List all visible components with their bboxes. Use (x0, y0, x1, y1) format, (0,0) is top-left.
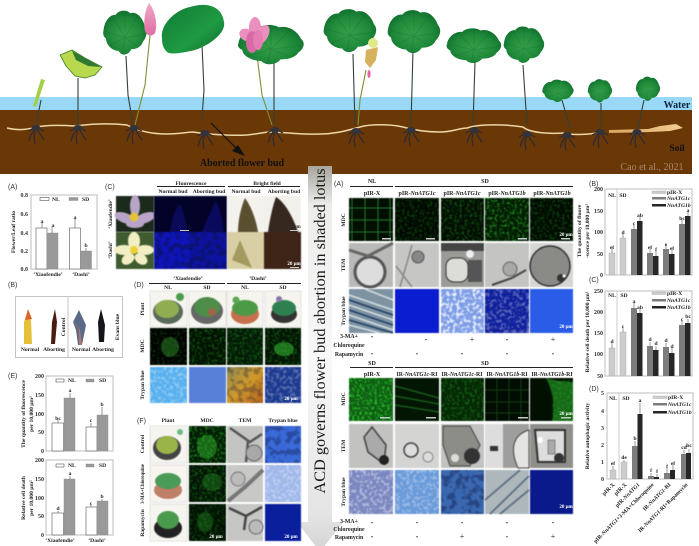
treatment table: Chloroquine (333, 343, 365, 349)
panel B right: quantity of fluorescence chart (577, 181, 692, 279)
panel C: fluorescence and bright field of buds: Bright field (253, 181, 282, 187)
yellow young leaf (60, 50, 102, 78)
fluorescence images (154, 196, 227, 269)
treatment table: + (551, 532, 556, 541)
panel B right: quantity of fluorescence chart: d (621, 230, 625, 236)
panel A right: first silencing image matrix: NL (368, 179, 376, 185)
leaves (103, 5, 660, 102)
chart: relative cell death: ‘Xiaofendie’ (45, 538, 75, 544)
treatment table: - (552, 349, 555, 358)
chart: relative cell death: 200 (35, 458, 44, 464)
panel F: treatments (137, 418, 301, 541)
chart: quantity of fluorescence (21, 374, 113, 455)
panel B: buds in control and Evans blue: (B) (8, 282, 17, 289)
panel D: plant, MDC and Trypan blue across cultivars: NL (164, 285, 172, 291)
panel A left: flower/leaf ratio chart: (A) (8, 184, 17, 191)
panel B: buds in control and Evans blue: Evans blue (115, 313, 121, 340)
treatment table: - (506, 335, 509, 344)
panel D: plant, MDC and Trypan blue across cultivars: (D) (134, 282, 144, 289)
panel A left: flower/leaf ratio chart: Flower/Leaf ratio (11, 211, 17, 253)
chart: quantity of fluorescence: a (69, 388, 72, 394)
panel A left: flower/leaf ratio chart: b (84, 243, 88, 249)
panel C right: relative cell death chart: d (648, 337, 652, 343)
panel A right: first silencing image matrix: pIR-NnATG1c (398, 191, 436, 197)
panel D right: relative autophagic activity chart: 3 (601, 426, 604, 432)
panel A right: second silencing image matrix: IR-NnATG1b-RI (486, 372, 528, 378)
panel D right: relative autophagic activity chart: Relative autophagic activity (585, 403, 591, 469)
panel B right: quantity of fluorescence chart: NnATG1c (666, 196, 691, 202)
panel A right: first silencing image matrix: 20 µm (559, 233, 573, 238)
chart: quantity of fluorescence: SD (99, 378, 106, 384)
panel D right: relative autophagic activity chart: NL (609, 396, 617, 402)
Trypan blue row (349, 289, 573, 333)
panel B right: quantity of fluorescence chart: NnATG1b (666, 203, 691, 209)
treatment table: - (371, 518, 374, 527)
panel B right: quantity of fluorescence chart: pIR-X (667, 190, 682, 196)
panel B: buds in control and Evans blue (8, 282, 122, 358)
panel D right: relative autophagic activity chart (585, 386, 693, 545)
TEM row (349, 243, 573, 287)
panel C: fluorescence and bright field of buds: 20 µm (287, 225, 301, 230)
panel A right: first silencing image matrix: SD (481, 179, 490, 185)
panel B right: quantity of fluorescence chart: 100 (594, 230, 603, 236)
MDC row (349, 198, 573, 241)
panel C right: relative cell death chart: 50 (597, 374, 603, 380)
panel B right: quantity of fluorescence chart: The quantity of fluore (577, 204, 583, 257)
panel B right: quantity of fluorescence chart: bc (679, 216, 685, 222)
panel C: fluorescence and bright field of buds: Fluorescence (176, 181, 207, 187)
panel C right: relative cell death chart: d (664, 338, 668, 344)
chart: relative cell death: c (90, 501, 93, 507)
panel C: fluorescence and bright field of buds: (C) (105, 184, 115, 191)
panel B right: quantity of fluorescence chart: 50 (597, 252, 603, 258)
treatment table: 3-MA+ (340, 334, 358, 340)
chart: relative cell death: Relative cell death (21, 475, 27, 520)
treatment table (333, 518, 556, 541)
panel A right: first silencing image matrix: pIR-X (364, 191, 381, 197)
lotus photo: Dashi (114, 232, 154, 269)
chart: relative cell death: 0 (41, 533, 44, 539)
panel C: fluorescence and bright field of buds: ‘Dashi’ (108, 241, 114, 259)
panel D right: relative autophagic activity chart: cd (681, 445, 688, 451)
chart: relative cell death: ‘Dashi’ (88, 538, 106, 544)
panel C: fluorescence and bright field of buds: Aborting bud (268, 189, 301, 195)
MDC images (150, 328, 301, 365)
panel F: treatments: 3-MA+Chloroquine (141, 464, 146, 504)
panel D right: relative autophagic activity chart: 4 (601, 409, 604, 415)
panel B right: quantity of fluorescence chart: ab (637, 213, 643, 219)
seed pod with withered petals (365, 38, 378, 78)
chart: quantity of fluorescence: The quantity of fluorescence (21, 380, 27, 448)
panel C right: relative cell death chart: 250 (594, 289, 603, 295)
panel A right: first silencing image matrix (333, 179, 573, 358)
panel C right: relative cell death chart: d (610, 339, 614, 345)
panel D: plant, MDC and Trypan blue across cultivars: NL (241, 285, 249, 291)
panel A right: second silencing image matrix (333, 361, 573, 541)
panel A right: first silencing image matrix: MDC (341, 213, 347, 227)
panel A left: flower/leaf ratio chart: SD (82, 197, 89, 203)
panel C: fluorescence and bright field of buds: Aborting bud (193, 189, 226, 195)
panel D right: relative autophagic activity chart: f (666, 464, 668, 470)
treatment table: - (461, 518, 464, 527)
rotated x labels: pIR-X (601, 482, 616, 497)
panel B right: quantity of fluorescence chart: SD (619, 193, 627, 199)
panel D right: relative autophagic activity chart: ef (611, 461, 615, 467)
panel A left: flower/leaf ratio chart: a (74, 215, 77, 221)
panel B right: quantity of fluorescence chart: ef (670, 246, 674, 252)
panel A left: flower/leaf ratio chart (8, 184, 97, 278)
panel C right: relative cell death chart: 150 (594, 331, 603, 337)
chart: relative cell death: d (56, 506, 60, 512)
rotated x labels: IR-NnATG1-RI+Rapamycin (637, 482, 690, 534)
panel B: buds in control and Evans blue: Aborting (43, 347, 65, 353)
treatment table: - (506, 532, 509, 541)
panel A left: flower/leaf ratio chart: a (41, 219, 44, 225)
lotus photo: Xiaofendie (113, 195, 157, 232)
chart: quantity of fluorescence: 200 (35, 374, 44, 380)
panel B right: quantity of fluorescence chart: a (687, 208, 690, 214)
treatment table: - (552, 518, 555, 527)
panel A right: first silencing image matrix: Trypan blue (341, 296, 347, 326)
panel A right: second silencing image matrix: SD (481, 361, 490, 367)
panel B right: quantity of fluorescence chart: NL (608, 193, 616, 199)
pink flower bud (144, 3, 156, 35)
panel C right: relative cell death chart: ab (637, 305, 643, 311)
Trypan blue images (265, 426, 301, 541)
panel B right: quantity of fluorescence chart: -scence per 10,000 µm² (585, 204, 591, 258)
panel A left: flower/leaf ratio chart: a (52, 223, 55, 229)
citation: Cao et al., 2021 (620, 162, 684, 173)
TEM images (227, 426, 263, 541)
panel A left: flower/leaf ratio chart: 0.6 (20, 212, 28, 218)
panel F: treatments: Control (140, 434, 146, 453)
bright field images (227, 196, 301, 269)
panel B right: quantity of fluorescence chart: 150 (594, 209, 603, 215)
panel C right: relative cell death chart: (C) (589, 277, 599, 284)
chart: quantity of fluorescence: per 10,000 µm² (29, 396, 35, 432)
panel D right: relative autophagic activity chart: NnATG1c (667, 402, 692, 408)
panel D: plant, MDC and Trypan blue across cultivars: SD (203, 285, 211, 291)
rhizome (7, 124, 597, 135)
treatment table: + (470, 335, 475, 344)
panel D right: relative autophagic activity chart: ef (671, 461, 675, 467)
panel D right: relative autophagic activity chart: de (621, 455, 627, 461)
chart: relative cell death: 150 (35, 477, 44, 483)
panel D right: relative autophagic activity chart: (D) (589, 386, 599, 393)
roots (28, 125, 645, 151)
chart: quantity of fluorescence: 100 (35, 412, 44, 418)
panel A right: second silencing image matrix: 20 µm (559, 505, 573, 510)
treatment table: + (460, 532, 465, 541)
rotated x labels: pIR-X (613, 482, 628, 497)
panel D right: relative autophagic activity chart: a (639, 398, 642, 404)
treatment table: Rapamycin (335, 535, 364, 541)
panel C right: relative cell death chart: Relative cell death per 10,000 µm² (585, 291, 591, 372)
treatment table: - (506, 518, 509, 527)
panel B right: quantity of fluorescence chart: 0 (600, 273, 603, 279)
chart: relative cell death: per 10,000 µm² (29, 480, 35, 516)
panel D: plant, MDC and Trypan blue across cultivars: ‘Xiaofendie’ (173, 276, 203, 282)
panel D: plant, MDC and Trypan blue across cultivars: SD (279, 285, 287, 291)
panel B right: quantity of fluorescence chart: ef (610, 245, 614, 251)
aborted bud label: Aborted flower bud (200, 158, 285, 169)
panel C right: relative cell death chart (585, 277, 692, 380)
panel D right: relative autophagic activity chart: NnATG1b (667, 410, 692, 416)
panel A right: first silencing image matrix: pIR-NnATG1b (488, 191, 526, 197)
panel C right: relative cell death chart: SD (620, 293, 628, 299)
panel A right: first silencing image matrix: (A) (334, 181, 343, 188)
panel B: buds in control and Evans blue: Normal (72, 347, 91, 353)
panel A left: flower/leaf ratio chart: 0.0 (20, 267, 28, 273)
panel B right: quantity of fluorescence chart: f (655, 247, 657, 253)
panel A right: first silencing image matrix: pIR-NnATG1b (533, 191, 571, 197)
TEM row (349, 424, 573, 468)
panel A right: second silencing image matrix: IR-NnATG1b-RI (531, 372, 573, 378)
panel E: fluorescence and cell death charts: (E) (8, 373, 17, 380)
panel C right: relative cell death chart: a (633, 299, 636, 305)
water layer (0, 97, 692, 110)
panel B right: quantity of fluorescence chart: c (633, 221, 636, 227)
chart: quantity of fluorescence: 0 (41, 449, 44, 455)
panel A right: second silencing image matrix: MDC (341, 392, 347, 406)
panel C right: relative cell death chart: d (670, 344, 674, 350)
panel D right: relative autophagic activity chart: f (650, 468, 652, 474)
panel A left: flower/leaf ratio chart: ‘Dashi’ (72, 272, 90, 278)
panel C: fluorescence and bright field of buds (105, 181, 301, 269)
treatment table: Rapamycin (335, 352, 364, 358)
panel F: treatments: (F) (137, 418, 146, 425)
panel C: fluorescence and bright field of buds: 20 µm (287, 262, 301, 267)
rotated x labels: pIR-NnATG1 (615, 482, 642, 509)
plant photos (150, 291, 301, 327)
panel D right: relative autophagic activity chart: b (633, 436, 637, 442)
panel C: fluorescence and bright field of buds: Normal bud (231, 189, 261, 195)
chart: quantity of fluorescence: b (100, 402, 104, 408)
panel C right: relative cell death chart: NnATG1c (666, 298, 691, 304)
panel F: treatments: 20 µm (209, 535, 223, 540)
panel B right: quantity of fluorescence chart: e (665, 242, 668, 248)
panel A right: second silencing image matrix: 20 µm (559, 412, 573, 417)
rotated x labels: IR-NnATG1-RI (642, 482, 672, 513)
panel D: plant, MDC and Trypan blue across cultivars: Trypan blue (140, 370, 146, 400)
chart: quantity of fluorescence: bc (55, 416, 61, 422)
Trypan blue images (150, 367, 301, 403)
chart: relative cell death: SD (99, 463, 106, 469)
panel D right: relative autophagic activity chart: pIR-X (668, 395, 683, 401)
treatment table: - (416, 532, 419, 541)
panel C right: relative cell death chart: pIR-X (667, 291, 682, 297)
panel F: treatments: Plant (162, 418, 175, 424)
panel D: plant, MDC and Trypan blue across cultivars: Plant (140, 302, 146, 315)
panel C right: relative cell death chart: c (622, 324, 625, 330)
panel F: treatments: Trypan blue (268, 418, 298, 424)
panel B right: quantity of fluorescence chart: (B) (589, 181, 598, 188)
panel D: plant, MDC and Trypan blue across cultivars (134, 276, 301, 403)
panel F: treatments: 20 µm (284, 535, 298, 540)
panel C right: relative cell death chart: NL (608, 293, 616, 299)
soil label: Soil (669, 144, 685, 154)
treatment table: + (551, 335, 556, 344)
treatment table: - (416, 518, 419, 527)
treatment table: 3-MA+ (340, 519, 358, 525)
MDC row (349, 378, 573, 421)
panel D: plant, MDC and Trypan blue across cultivars: 20 µm (284, 397, 298, 402)
pink lotus flower (237, 17, 273, 53)
rotated x labels (593, 482, 690, 545)
panel A right: second silencing image matrix: IR-NnATG1c-RI (397, 372, 438, 378)
panel F: treatments: Rapamycin (140, 508, 146, 537)
flower stalks (135, 35, 366, 125)
treatment table: Chloroquine (333, 527, 365, 533)
aborted bud arrow (211, 123, 245, 156)
treatment table: - (371, 532, 374, 541)
treatment table: - (416, 349, 419, 358)
Trypan blue row (349, 470, 573, 514)
panel A right: second silencing image matrix: TEM (341, 439, 347, 452)
panel F: treatments: TEM (239, 418, 252, 424)
panel C right: relative cell death chart: NnATG1b (666, 305, 691, 311)
panel D right: relative autophagic activity chart: 0 (601, 477, 604, 483)
panel A right: first silencing image matrix: 20 µm (559, 325, 573, 330)
panel C right: relative cell death chart: c (681, 317, 684, 323)
panel D right: relative autophagic activity chart: f (656, 469, 658, 475)
panel B: buds in control and Evans blue: Aborting (92, 347, 114, 353)
panel A right: second silencing image matrix: pIR-X (364, 372, 381, 378)
panel D right: relative autophagic activity chart: 5 (601, 391, 604, 397)
panel A left: flower/leaf ratio chart: ‘Xiaofendie’ (33, 272, 63, 278)
rotated x labels: pIR-NnATG1+3-MA+Chloroquine (593, 482, 656, 545)
treatment table (333, 332, 556, 358)
panel B right: quantity of fluorescence chart: ef (648, 245, 652, 251)
panel F: treatments: MDC (200, 418, 214, 424)
panel C right: relative cell death chart: 200 (594, 310, 603, 316)
illustration: lotus growth in water and soil (0, 3, 692, 174)
tuber tip (609, 124, 683, 133)
treatment table: - (506, 349, 509, 358)
chart: quantity of fluorescence: c (90, 418, 93, 424)
panel D right: relative autophagic activity chart: 1 (601, 460, 604, 466)
panel C right: relative cell death chart: 100 (594, 352, 603, 358)
panel D: plant, MDC and Trypan blue across cultivars: ‘Dashi’ (249, 276, 267, 282)
panel C right: relative cell death chart: d (654, 341, 658, 347)
panel A left: flower/leaf ratio chart: 0.2 (20, 249, 28, 255)
panel A left: flower/leaf ratio chart: 0.8 (20, 193, 28, 199)
MDC images (189, 426, 226, 541)
water label: Water (664, 100, 691, 111)
chart: relative cell death: a (69, 471, 72, 477)
stems (36, 45, 644, 128)
chart: relative cell death: b (100, 494, 104, 500)
panel A right: first silencing image matrix: pIR-NnATG1c (443, 191, 481, 197)
chart: relative cell death (21, 458, 113, 544)
panel A right: first silencing image matrix: TEM (341, 258, 347, 271)
panel D right: relative autophagic activity chart: SD (622, 396, 630, 402)
panel E: fluorescence and cell death charts (8, 373, 113, 544)
panel C: fluorescence and bright field of buds: ‘Xiaofendie’ (108, 199, 114, 229)
panel D right: relative autophagic activity chart: bc (686, 443, 692, 449)
panel B: buds in control and Evans blue: Normal (21, 347, 40, 353)
young shoot (33, 79, 45, 107)
panel A right: second silencing image matrix: Trypan blue (341, 477, 347, 507)
treatment table: - (461, 349, 464, 358)
panel A left: flower/leaf ratio chart: 0.4 (20, 231, 28, 237)
panel D right: relative autophagic activity chart: 2 (601, 443, 604, 449)
panel B right: quantity of fluorescence chart: 200 (594, 187, 603, 193)
chart: relative cell death: NL (68, 463, 76, 469)
soil layer (0, 110, 692, 174)
chart: quantity of fluorescence: NL (68, 378, 76, 384)
treatment table: - (371, 349, 374, 358)
chart: relative cell death: 100 (35, 496, 44, 502)
panel A right: second silencing image matrix: IR-NnATG1c-RI (442, 372, 483, 378)
treatment table: - (371, 332, 374, 341)
central title: ACD governs flower bud abortion in shaded lotus (310, 168, 329, 494)
chart: quantity of fluorescence: 150 (35, 393, 44, 399)
panel A right: second silencing image matrix: SD (368, 361, 377, 367)
chart: relative cell death: 50 (38, 514, 44, 520)
panel C: fluorescence and bright field of buds: Normal bud (158, 189, 188, 195)
treatment table: - (425, 335, 428, 344)
panel C right: relative cell death chart: bc (685, 314, 691, 320)
panel D: plant, MDC and Trypan blue across cultivars: MDC (140, 339, 146, 353)
chart: quantity of fluorescence: 50 (38, 430, 44, 436)
plant photos (150, 426, 187, 541)
panel A left: flower/leaf ratio chart: NL (52, 197, 60, 203)
central arrow with vertical title (297, 166, 343, 546)
panel B: buds in control and Evans blue: Control (61, 317, 67, 336)
